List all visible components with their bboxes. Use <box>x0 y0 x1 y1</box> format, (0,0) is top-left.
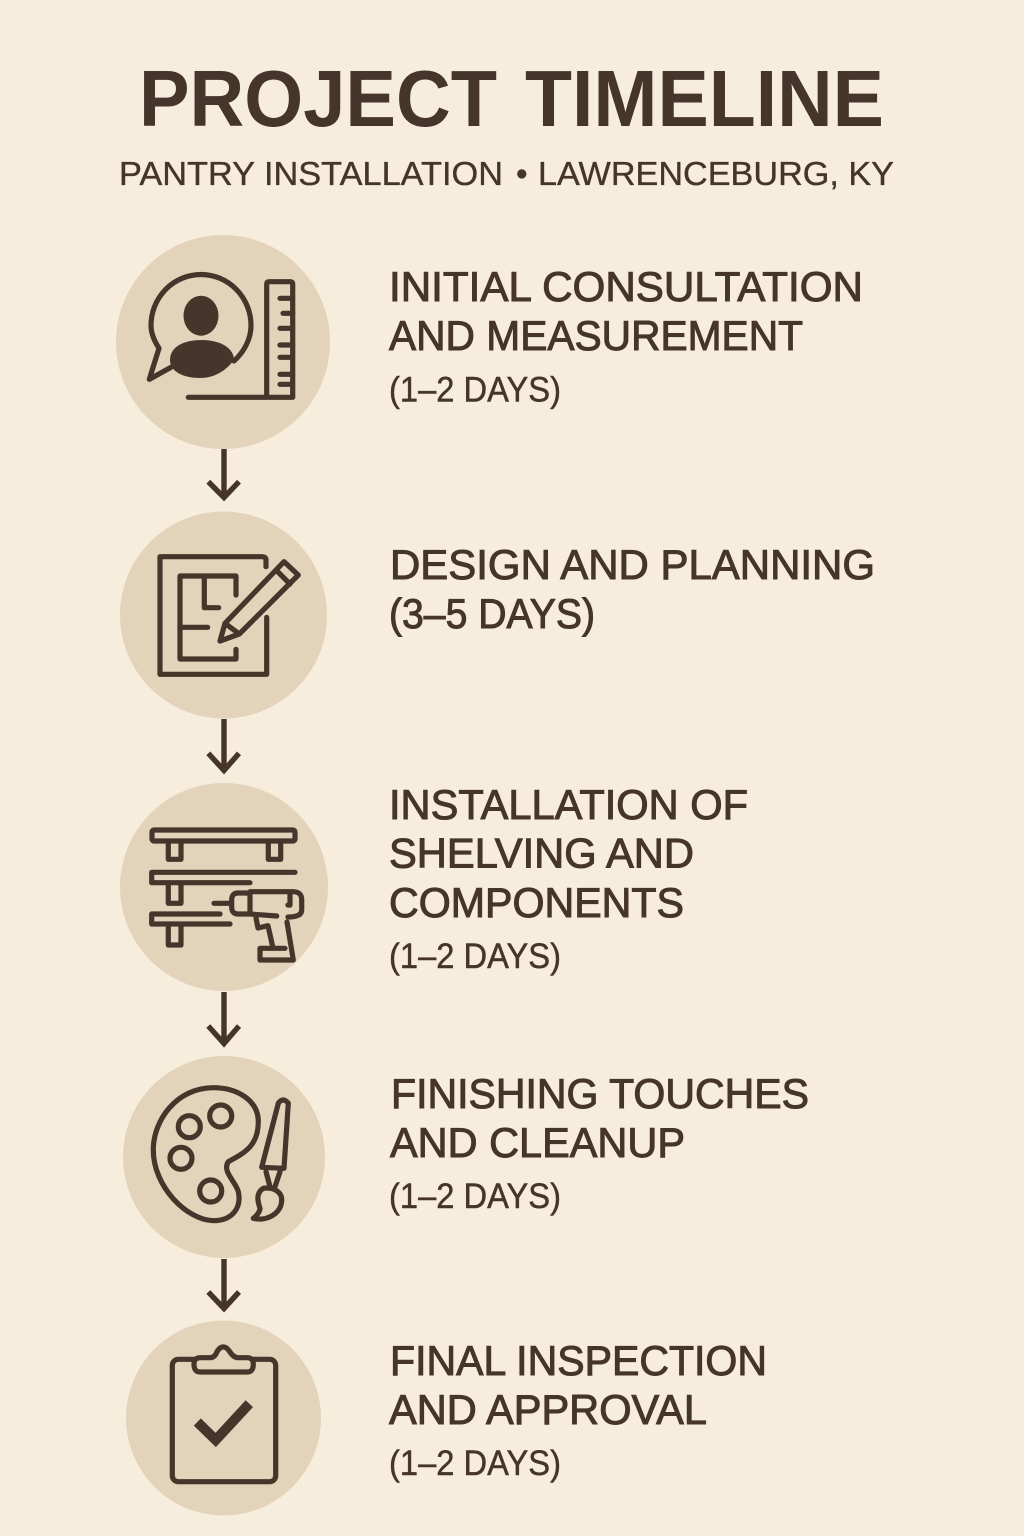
step 5 text: FINAL INSPECTION <box>390 1337 767 1384</box>
step 4 text: FINISHING TOUCHES <box>391 1070 809 1117</box>
step 3 text: (1–2 DAYS) <box>389 937 561 976</box>
step 4 circle with icon: palette and brush <box>123 1056 325 1258</box>
arrow 2 <box>208 719 239 770</box>
arrow 1 <box>208 449 239 498</box>
subtitle: • <box>516 155 528 192</box>
subtitle <box>119 155 894 192</box>
step 2 text: (3–5 DAYS) <box>389 590 595 637</box>
step 1 circle with icon: consultation and ruler <box>116 235 330 449</box>
step 3 circle with icon: shelves and drill <box>120 783 328 991</box>
step 3 text <box>389 781 748 976</box>
step 2 text: DESIGN AND PLANNING <box>390 541 875 588</box>
title: PROJECT <box>139 54 497 143</box>
step 5 text <box>389 1337 767 1483</box>
step 1 text <box>389 263 863 410</box>
subtitle: PANTRY INSTALLATION <box>119 155 503 192</box>
subtitle: LAWRENCEBURG, KY <box>538 155 894 192</box>
title <box>139 54 884 143</box>
step 5 text: (1–2 DAYS) <box>389 1444 561 1483</box>
step 5 text: AND APPROVAL <box>389 1386 707 1433</box>
arrow 3 <box>208 992 239 1044</box>
step 5 circle with icon: clipboard and check <box>126 1320 321 1516</box>
step 4 text: AND CLEANUP <box>390 1119 685 1166</box>
arrow 4 <box>208 1259 239 1308</box>
step 4 text: (1–2 DAYS) <box>389 1177 561 1216</box>
step 2 text <box>389 541 875 637</box>
step 4 text <box>389 1070 809 1216</box>
title: TIMELINE <box>525 54 884 143</box>
step 3 text: COMPONENTS <box>389 879 684 926</box>
step 2 circle with icon: plan and pencil <box>120 512 327 718</box>
step 3 text: INSTALLATION OF <box>389 781 748 828</box>
step 1 text: (1–2 DAYS) <box>389 370 561 410</box>
step 1 text: INITIAL CONSULTATION <box>389 263 863 310</box>
step 1 text: AND MEASUREMENT <box>389 312 803 359</box>
step 3 text: SHELVING AND <box>389 830 694 876</box>
